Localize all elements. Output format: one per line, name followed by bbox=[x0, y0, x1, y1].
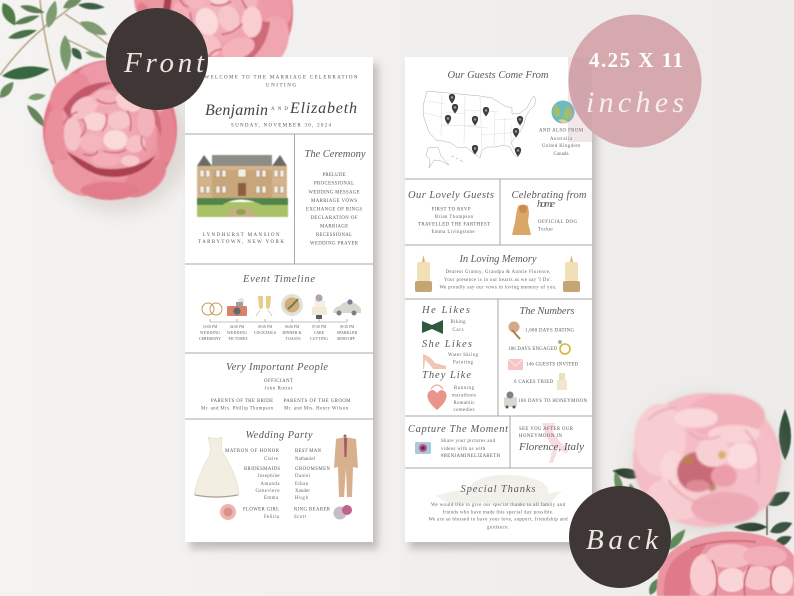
text: wedding party names: Ethan bbox=[295, 482, 309, 487]
panel: celebrating from home bbox=[512, 190, 587, 235]
text: wedding party names: Claire bbox=[264, 457, 278, 462]
shadow: front card bbox=[190, 64, 378, 549]
panel: he likes she likes they like: Running bbox=[454, 386, 475, 391]
panel: he likes she likes they like: Romantic bbox=[454, 401, 474, 406]
illustration: suit bbox=[334, 434, 358, 497]
map: united states with pins bbox=[423, 91, 536, 168]
panel: honeymoon: HONEYMOON IN bbox=[519, 434, 563, 439]
heading: welcome: Benjamin bbox=[205, 102, 268, 119]
text: also from: Australia bbox=[550, 137, 573, 142]
text: wedding party names: Xander bbox=[295, 489, 310, 494]
caption: venue bbox=[198, 233, 284, 245]
panel: he likes she likes they like: marathons bbox=[452, 394, 476, 399]
icon: golden retriever bbox=[512, 204, 531, 235]
icon: bow tie bbox=[422, 320, 443, 334]
panel: in loving memory: Dearest Granny, Grandpa & Auntie Florence, bbox=[446, 270, 550, 275]
decoration: bottom-right leaves bbox=[611, 409, 794, 596]
text: wedding party names: MATRON OF HONOR bbox=[225, 449, 280, 454]
panel: our lovely guests: Brian Thompson bbox=[435, 215, 474, 220]
panel: very important people: John Rutter bbox=[264, 387, 293, 392]
heading: welcome: Elizabeth bbox=[289, 100, 357, 117]
panel: capture the moment: Capture The Moment bbox=[408, 424, 509, 435]
panel: capture the moment: Share your pictures and bbox=[441, 439, 496, 444]
decoration: peony shadow bbox=[46, 72, 190, 212]
text: wedding party names: FLOWER GIRL bbox=[243, 508, 279, 513]
icon: ring pillow flowers bbox=[334, 505, 352, 520]
icon: globe bbox=[552, 100, 574, 124]
panel: the ceremony: PROCESSIONAL bbox=[314, 182, 354, 187]
heading: our guests come from: Our Guests Come From bbox=[448, 70, 549, 81]
panel: the numbers: 6 CAKES TRIED bbox=[514, 380, 554, 385]
icon: instagram camera bbox=[415, 442, 431, 454]
panel: our lovely guests bbox=[408, 190, 494, 235]
panel: the ceremony: MARRIAGE VOWS bbox=[311, 199, 357, 204]
text: times and labels: CEREMONY bbox=[199, 337, 221, 341]
panel: the ceremony: The Ceremony bbox=[304, 149, 366, 160]
decoration: top peony bbox=[110, 0, 315, 114]
text: times and labels: WEDDING bbox=[200, 331, 220, 335]
panel: back card bbox=[405, 57, 592, 542]
panel: the ceremony: MARRIAGE bbox=[320, 225, 348, 230]
panel: our lovely guests: Emma Livingstone bbox=[432, 230, 474, 235]
text: times and labels: CUTTING bbox=[310, 337, 328, 341]
badge: size: inches bbox=[586, 86, 684, 119]
decoration: right pale peony bbox=[633, 393, 781, 532]
panel: capture the moment: #BENJAMINELIZABETH bbox=[441, 454, 501, 459]
panel: the ceremony: PRELUDE bbox=[322, 173, 346, 178]
panel: special thanks: We would like to give our special thanks to all family and bbox=[431, 503, 566, 508]
panel: the ceremony: WEDDING MESSAGE bbox=[308, 190, 360, 195]
text: also from: AND ALSO FROM bbox=[539, 129, 584, 134]
heading: welcome: AND bbox=[271, 107, 288, 112]
text: wedding party names: Scott bbox=[294, 515, 307, 520]
panel: very important people bbox=[201, 362, 351, 412]
badge: front bbox=[106, 8, 208, 110]
panel: in loving memory: We proudly say our vows in loving memory of you. bbox=[440, 285, 556, 290]
panel: event timeline: Event Timeline bbox=[242, 274, 315, 285]
decoration: front left peony bbox=[43, 60, 177, 205]
shadow: back card bbox=[409, 64, 597, 549]
panel: the ceremony: DECLARATION OF bbox=[310, 216, 358, 221]
panel: the numbers bbox=[504, 306, 588, 408]
panel: celebrating from home: Celebrating from bbox=[512, 190, 587, 201]
text: wedding party names: Daniel bbox=[295, 474, 311, 479]
heading: welcome: UNITING bbox=[266, 84, 296, 88]
panel: capture the moment: videos with us with bbox=[441, 447, 486, 452]
text: wedding party names: Felicia bbox=[264, 515, 280, 520]
panel: in loving memory: In Loving Memory bbox=[458, 254, 537, 265]
panel: very important people: Very Important People bbox=[226, 362, 328, 373]
text: wedding party names: Hugh bbox=[295, 496, 309, 501]
text: times and labels: 09:30 PM bbox=[340, 325, 355, 329]
panel: celebrating from home: Tucker bbox=[538, 228, 553, 233]
text: wedding party names: Emma bbox=[264, 496, 279, 501]
icon: heart lock bbox=[427, 385, 447, 410]
panel: the numbers: The Numbers bbox=[520, 306, 574, 317]
panel: special thanks: friends who have made this special day possible. bbox=[442, 511, 554, 516]
icon: left candle bbox=[415, 255, 432, 292]
icon: car bbox=[504, 392, 517, 408]
badge: size: 4.25 X 11 bbox=[589, 48, 683, 72]
text: times and labels: WEDDING bbox=[227, 331, 247, 335]
panel: he likes she likes they like bbox=[421, 305, 479, 413]
icon: high heel bbox=[423, 354, 446, 369]
text: times and labels: 05:00 PM bbox=[258, 325, 273, 329]
text: times and labels: DINNER & bbox=[282, 331, 302, 335]
panel: front card bbox=[106, 8, 702, 588]
badge: back bbox=[569, 486, 671, 588]
icon: cake bbox=[312, 294, 327, 319]
panel: the numbers: 186 DAYS ENGAGED bbox=[508, 347, 558, 352]
panel: he likes she likes they like: Water Skiing bbox=[448, 353, 479, 358]
illustration: mansion bbox=[197, 155, 288, 217]
text: also from bbox=[539, 129, 584, 157]
icon: ribbon bbox=[436, 475, 562, 506]
panel: honeymoon: Florence, Italy bbox=[518, 441, 584, 453]
icon: ring bbox=[558, 340, 570, 354]
panel: he likes she likes they like: Cars bbox=[452, 328, 464, 333]
icon: camera bbox=[227, 298, 247, 316]
text: wedding party names: Genevieve bbox=[256, 489, 280, 494]
panel: wedding party: Wedding Party bbox=[246, 430, 313, 441]
icon: bouquet bbox=[508, 322, 520, 339]
caption: venue: TARRYTOWN, NEW YORK bbox=[198, 240, 284, 245]
panel: he likes she likes they like: Biking bbox=[450, 320, 466, 325]
panel: honeymoon bbox=[518, 423, 584, 463]
panel: very important people: Mr. and Mrs. Phillip Thompson bbox=[201, 407, 274, 412]
dividers bbox=[185, 134, 373, 419]
panel: very important people: PARENTS OF THE BRIDE bbox=[211, 399, 273, 404]
panel: very important people: Mr. and Mrs. Henry Wilson bbox=[284, 407, 349, 412]
heading: welcome bbox=[204, 76, 358, 129]
text: also from: Canada bbox=[554, 152, 569, 157]
dividers bbox=[405, 179, 592, 468]
icon: car bbox=[333, 299, 361, 316]
text: times and labels: 07:00 PM bbox=[312, 325, 327, 329]
decoration: top-left eucalyptus leaves bbox=[0, 0, 110, 130]
text: times and labels: CAKE bbox=[314, 331, 325, 335]
panel: the ceremony bbox=[304, 149, 366, 247]
panel: the ceremony: EXCHANGE OF RINGS bbox=[306, 208, 362, 213]
panel: special thanks: We are so blessed to have your love, support, friendship and bbox=[428, 518, 568, 523]
icon: champagne bbox=[256, 296, 272, 316]
text: wedding party names: Josephine bbox=[258, 474, 280, 479]
panel: capture the moment bbox=[408, 424, 509, 459]
panel: the numbers: 146 GUESTS INVITED bbox=[526, 363, 579, 368]
panel: he likes she likes they like: She Likes bbox=[422, 339, 472, 350]
illustration: dress bbox=[194, 437, 239, 498]
heading: welcome: SUNDAY, NOVEMBER 30, 2024 bbox=[231, 124, 332, 129]
text: times and labels: COCKTAILS bbox=[254, 331, 276, 335]
panel: in loving memory: Your presence is in our hearts as we say 'I Do'. bbox=[444, 278, 552, 283]
panel: the numbers: 1,680 DAYS DATING bbox=[525, 329, 575, 334]
caption: venue: LYNDHURST MANSION bbox=[202, 233, 280, 238]
panel: in loving memory bbox=[415, 254, 580, 292]
panel: our lovely guests: TRAVELLED THE FARTHEST bbox=[418, 223, 490, 228]
icon: flower bbox=[220, 504, 236, 520]
text: times and labels: 06:00 PM bbox=[285, 325, 300, 329]
panel: our lovely guests: FIRST TO RSVP bbox=[432, 208, 471, 213]
icon: envelope bbox=[508, 359, 523, 370]
text: wedding party names: Nathaniel bbox=[295, 457, 316, 462]
panel: the ceremony: WEDDING PRAYER bbox=[310, 242, 359, 247]
text: wedding party names: BRIDESMAIDS bbox=[244, 467, 280, 472]
icon: rings bbox=[202, 303, 222, 315]
text: times and labels: 10:00 PM bbox=[203, 325, 218, 329]
text: times and labels: SPARKLER bbox=[337, 331, 357, 335]
icon: right candle bbox=[563, 255, 580, 292]
text: times and labels: TOASTS bbox=[286, 337, 300, 341]
panel: very important people: OFFICIANT bbox=[264, 379, 293, 384]
panel: celebrating from home: OFFICIAL DOG bbox=[538, 220, 578, 225]
panel: our lovely guests: Our Lovely Guests bbox=[408, 190, 494, 201]
text: times and labels bbox=[199, 325, 357, 341]
badge: size bbox=[568, 14, 702, 148]
heading: welcome: WELCOME TO THE MARRIAGE CELEBRATION bbox=[204, 76, 358, 80]
text: wedding party names: Amanda bbox=[260, 482, 280, 487]
badge: front: Front bbox=[123, 47, 205, 79]
badge: back: Back bbox=[586, 524, 659, 556]
panel: he likes she likes they like: They Like bbox=[422, 370, 471, 381]
panel: he likes she likes they like: comedies bbox=[454, 408, 475, 413]
text: times and labels: 04:00 PM bbox=[230, 325, 245, 329]
icon: cake bbox=[557, 373, 567, 390]
text: wedding party names: GROOMSMEN bbox=[295, 467, 331, 472]
panel: special thanks: Special Thanks bbox=[460, 484, 536, 495]
panel: the numbers: 186 DAYS TO HONEYMOON bbox=[518, 399, 588, 404]
decoration: bottom peony bbox=[657, 532, 794, 596]
text: times and labels: SEND-OFF bbox=[337, 337, 355, 341]
panel: he likes she likes they like: He Likes bbox=[421, 305, 470, 316]
panel: the ceremony: RECESSIONAL bbox=[316, 233, 352, 238]
text: also from: United Kingdom bbox=[542, 144, 580, 149]
text: wedding party names: BEST MAN bbox=[295, 449, 322, 454]
panel: honeymoon: SEE YOU AFTER OUR bbox=[519, 427, 574, 432]
icon: plate bbox=[281, 294, 303, 316]
panel: wedding party bbox=[194, 430, 358, 520]
panel: very important people: PARENTS OF THE GROOM bbox=[284, 399, 351, 404]
panel: special thanks: guidance. bbox=[487, 525, 509, 530]
panel: he likes she likes they like: Painting bbox=[453, 360, 474, 366]
panel: special thanks bbox=[428, 475, 568, 530]
icon: italy map bbox=[542, 423, 569, 463]
text: wedding party names: RING BEARER bbox=[294, 508, 331, 513]
panel: celebrating from home: home bbox=[537, 199, 555, 210]
text: wedding party names bbox=[225, 449, 331, 520]
panel: event timeline bbox=[199, 274, 361, 341]
text: times and labels: PICTURES bbox=[228, 337, 248, 341]
